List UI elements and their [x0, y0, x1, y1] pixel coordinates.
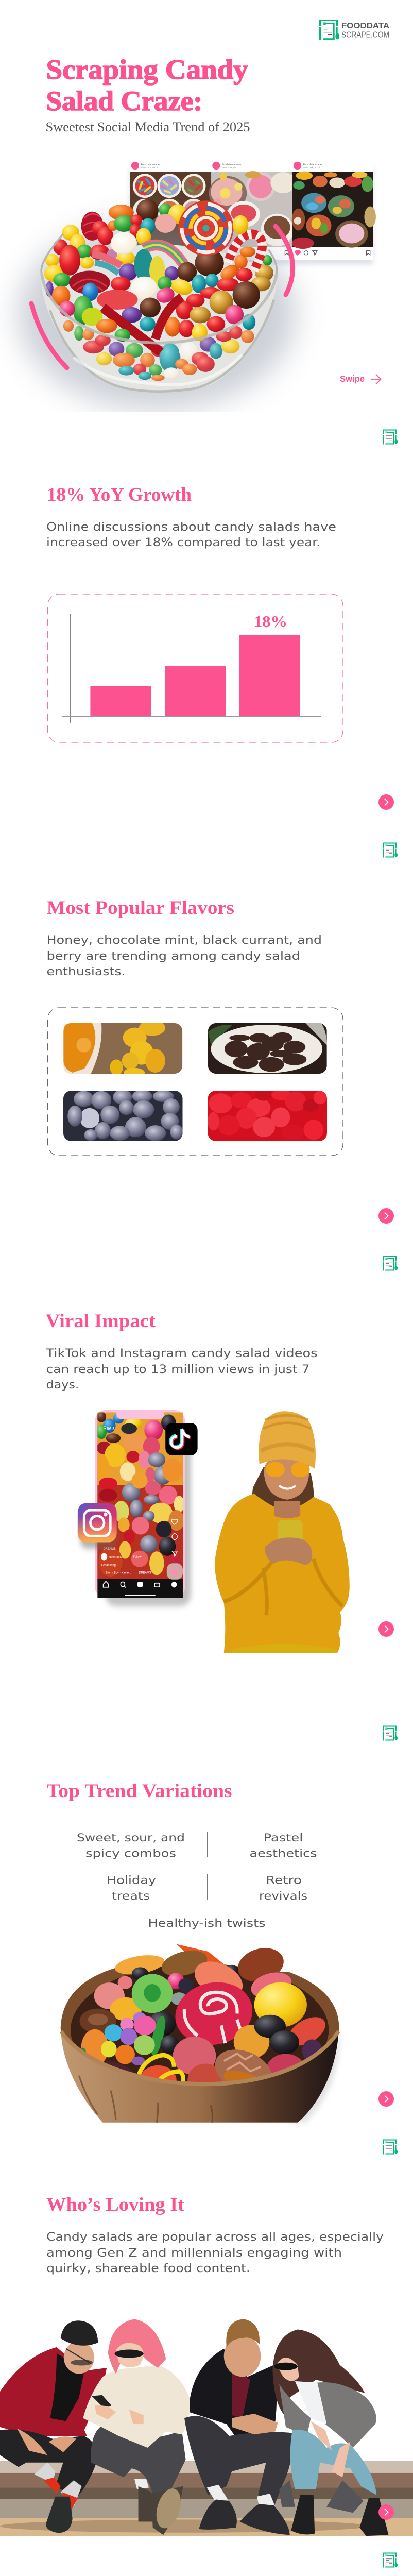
panel: who's loving it [0, 2194, 413, 2536]
next arrow [378, 1208, 394, 1224]
phone mockup: Follow [133, 1556, 142, 1559]
panel: challenges [383, 2552, 398, 2568]
photo: chocolate mint [208, 1023, 327, 1074]
body text: Candy salads are popular across all ages, especially [46, 2231, 384, 2244]
variation list: spicy combos [85, 1848, 176, 1860]
logo: FoodData Scrape: SCRAPE.COM [341, 31, 389, 39]
post photo: candy bowls on wood [130, 172, 211, 247]
icon: TikTok [165, 1423, 198, 1455]
variation list: Retro [266, 1874, 302, 1887]
heading: Who’s Loving It [46, 2194, 185, 2215]
body text: quirky, shareable food content. [46, 2262, 250, 2275]
variation list: Holiday [107, 1874, 156, 1887]
decorative pink arcs [31, 226, 293, 368]
title [46, 54, 248, 116]
phone mockup: DREAMS [104, 1548, 116, 1551]
body text [45, 1347, 317, 1392]
panel: hero [6, 20, 389, 412]
social post cards: New York, NY > [141, 166, 158, 169]
bar label: 18% [254, 612, 287, 631]
social post cards: Food data scraper [303, 163, 322, 165]
bar: third year [239, 635, 300, 716]
body text: days. [46, 1379, 79, 1392]
panel: top trend variations [46, 1726, 398, 2155]
panel: 18% YoY growth [46, 430, 398, 810]
social post cards: Food data scraper [141, 163, 160, 165]
heading: 18% YoY Growth [47, 484, 192, 505]
lollipop [178, 200, 234, 256]
bar: second year [165, 666, 226, 716]
heading: Viral Impact [45, 1311, 156, 1332]
title: Scraping Candy [46, 54, 248, 85]
icon: logo mark [383, 1256, 398, 1270]
phone mockup: Storm Boy · Xavier.. [106, 1571, 131, 1574]
person: black coat [184, 2319, 293, 2535]
post photo: dark candy trays [292, 172, 376, 249]
social post cards: New York, NY > [303, 166, 320, 169]
panel: most popular flavors [46, 843, 398, 1224]
social post cards [130, 160, 376, 264]
photo: berry gummies [208, 1091, 327, 1141]
body text: increased over 18% compared to last year. [46, 536, 320, 549]
bar chart panel [48, 594, 343, 742]
body text: TikTok and Instagram candy salad videos [45, 1347, 317, 1360]
variation list: treats [112, 1890, 150, 1902]
post actions row [285, 250, 370, 255]
next arrow [378, 1621, 394, 1637]
subtitle: Sweetest Social Media Trend of 2025 [45, 120, 250, 134]
variation list: Sweet, sour, and [77, 1832, 185, 1844]
candy cane [228, 234, 262, 271]
post photo: pastel candy table [209, 171, 296, 247]
phone mockup [95, 1410, 185, 1598]
body text: Online discussions about candy salads have [46, 521, 336, 534]
person: long hair and grey cardigan [272, 2329, 388, 2536]
bar: first year [90, 686, 151, 716]
body text: can reach up to 13 million views in just 7 [46, 1363, 310, 1376]
phone mockup: DREAMS [139, 1571, 151, 1574]
body text: Honey, chocolate mint, black currant, and [46, 934, 322, 947]
body text [46, 2231, 384, 2275]
next arrow [378, 2504, 394, 2520]
icon: logo mark [383, 843, 398, 857]
photo: woman in yellow sweater with phone [215, 1411, 350, 1653]
swipe label and arrow: Swipe [340, 374, 365, 384]
photo: wooden bowl of candy [61, 1943, 340, 2123]
panel: viral impact [45, 1256, 398, 1653]
icon: logo mark [383, 2552, 398, 2568]
heading: Top Trend Variations [46, 1781, 232, 1802]
icon: Instagram [78, 1503, 117, 1543]
icon: logo mark [383, 2139, 398, 2155]
person: pink hair and cream fleece [83, 2319, 190, 2535]
dashed flavor panel [48, 1008, 343, 1156]
variation list [77, 1832, 317, 1929]
image: glass bowl of candy [41, 199, 277, 392]
photo: honey candy [63, 1023, 182, 1074]
next arrow [378, 794, 394, 810]
title: Salad Craze: [46, 86, 203, 116]
variation list: Pastel [264, 1832, 303, 1844]
body text [46, 934, 322, 978]
logo: FoodData Scrape [319, 20, 389, 40]
variation list: revivals [259, 1890, 307, 1902]
social post cards: Food data scraper [222, 163, 242, 165]
icon: logo mark [383, 430, 398, 444]
body text: berry are trending among candy salad [46, 950, 300, 963]
photo: four friends on a ledge [0, 2319, 413, 2536]
variation list: Healthy-ish twists [148, 1917, 266, 1929]
person: red jacket [0, 2320, 107, 2533]
phone shadow [106, 1426, 191, 1606]
illustration group in source coords [78, 1410, 350, 1653]
phone mockup: username [109, 1556, 123, 1559]
glass rim [42, 274, 277, 343]
photo: black currant [63, 1091, 182, 1141]
body text: enthusiasts. [46, 965, 126, 978]
heading: Most Popular Flavors [46, 897, 234, 919]
variation list: aesthetics [249, 1848, 317, 1860]
phone mockup: Reels [104, 1426, 115, 1431]
logo: FoodData Scrape: FOODDATA [341, 22, 389, 30]
swipe label and arrow [340, 374, 381, 384]
phone mockup: Great song! [101, 1564, 117, 1567]
next arrow [378, 2091, 394, 2107]
social post cards: New York, NY > [222, 166, 239, 169]
icon: logo mark [383, 1726, 398, 1740]
body text: among Gen Z and millennials engaging with [46, 2247, 342, 2260]
bowl soft shadow [18, 219, 296, 410]
body text [46, 521, 336, 549]
instagram shadow [80, 1512, 116, 1549]
